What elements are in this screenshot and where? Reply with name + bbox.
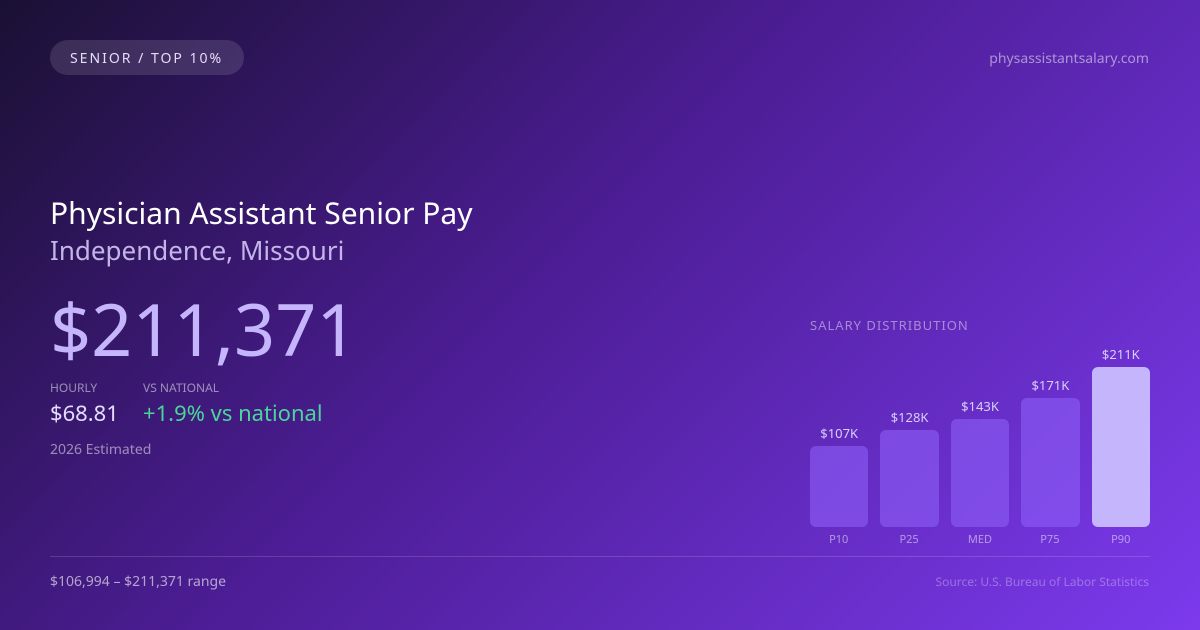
axis label P10: P10 (829, 532, 848, 547)
axis label P90: P90 (1111, 532, 1130, 547)
value P75: $171K (1031, 376, 1069, 394)
versus national label: VS NATIONAL (143, 379, 219, 396)
site name: physassistantsalary.com (989, 49, 1149, 68)
salary range: $106,994 – $211,371 range (50, 572, 226, 591)
value P90: $211K (1102, 345, 1140, 363)
bar P10 (810, 446, 868, 527)
bar P25 (880, 430, 939, 527)
axis label median: MED (968, 532, 992, 547)
value P25: $128K (891, 408, 928, 426)
hourly value: $68.81 (50, 398, 119, 428)
badge: senior / top 10%: SENIOR / TOP 10% (70, 49, 223, 68)
hourly label: HOURLY (50, 379, 97, 396)
bar P75 (1021, 398, 1080, 527)
versus national stat (143, 379, 323, 428)
title: Physician Assistant Senior Pay (50, 192, 473, 233)
axis label P25: P25 (899, 532, 919, 547)
versus national value: +1.9% vs national (143, 398, 323, 428)
value P10: $107K (820, 424, 858, 442)
chart heading: SALARY DISTRIBUTION (810, 316, 969, 334)
badge: senior / top 10% (50, 40, 244, 75)
bar median (951, 419, 1009, 527)
axis label P75: P75 (1040, 532, 1060, 547)
year note: 2026 Estimated (50, 440, 151, 459)
hourly stat (50, 379, 119, 428)
bar P90 (1092, 367, 1150, 527)
value median: $143K (961, 397, 999, 415)
headline salary: $211,371 (50, 280, 358, 378)
subtitle: location: Independence, Missouri (50, 232, 344, 268)
source note: Source: U.S. Bureau of Labor Statistics (936, 573, 1149, 590)
